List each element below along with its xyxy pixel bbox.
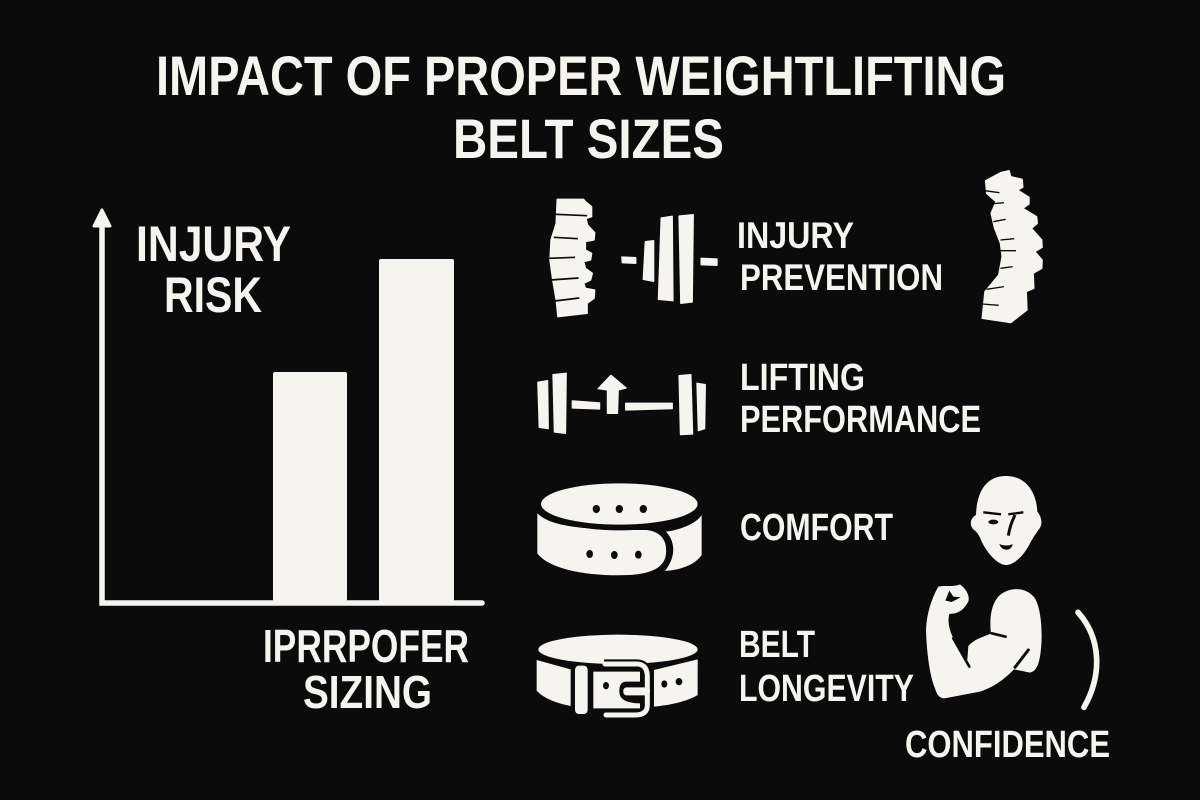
icon: barbell with up arrow xyxy=(538,373,705,435)
axis label: improper sizing: SIZING xyxy=(303,666,432,718)
chart axes xyxy=(102,224,482,603)
y axis arrowhead xyxy=(94,210,110,226)
title xyxy=(156,44,1006,170)
label: comfort: COMFORT xyxy=(740,507,893,549)
label: injury prevention xyxy=(737,215,943,298)
icon: belt with buckle xyxy=(537,635,698,715)
label: belt longevity xyxy=(739,624,914,710)
axis label: injury risk xyxy=(136,216,291,323)
axis label: improper sizing: IPRRPOFER xyxy=(263,620,469,672)
label: injury prevention: PREVENTION xyxy=(740,257,943,298)
bar chart: injury risk xyxy=(94,210,482,718)
icon: confident head xyxy=(971,476,1041,565)
icon: right spine xyxy=(982,171,1042,323)
axis label: injury risk: INJURY xyxy=(136,216,291,272)
icon: flexed arm xyxy=(926,584,1042,698)
axis label: injury risk: RISK xyxy=(164,267,262,323)
label: lifting performance: PERFORMANCE xyxy=(740,399,981,441)
title: BELT SIZES xyxy=(453,107,724,170)
label: lifting performance: LIFTING xyxy=(740,357,865,399)
label: confidence: CONFIDENCE xyxy=(905,724,1110,766)
icon: barbell plates xyxy=(622,215,717,303)
axis label: improper sizing xyxy=(263,620,469,718)
label: lifting performance xyxy=(740,357,981,441)
icon: comfort belt xyxy=(536,480,703,575)
bar: proper sizing xyxy=(273,372,347,601)
label: injury prevention: INJURY xyxy=(737,215,854,256)
title: IMPACT OF PROPER WEIGHTLIFTING xyxy=(156,44,1006,107)
label: belt longevity: LONGEVITY xyxy=(739,668,914,710)
bar: improper sizing xyxy=(379,259,454,601)
icon: left spine xyxy=(549,199,595,317)
icon: curved motion line xyxy=(1078,612,1097,707)
label: belt longevity: BELT xyxy=(739,624,815,666)
